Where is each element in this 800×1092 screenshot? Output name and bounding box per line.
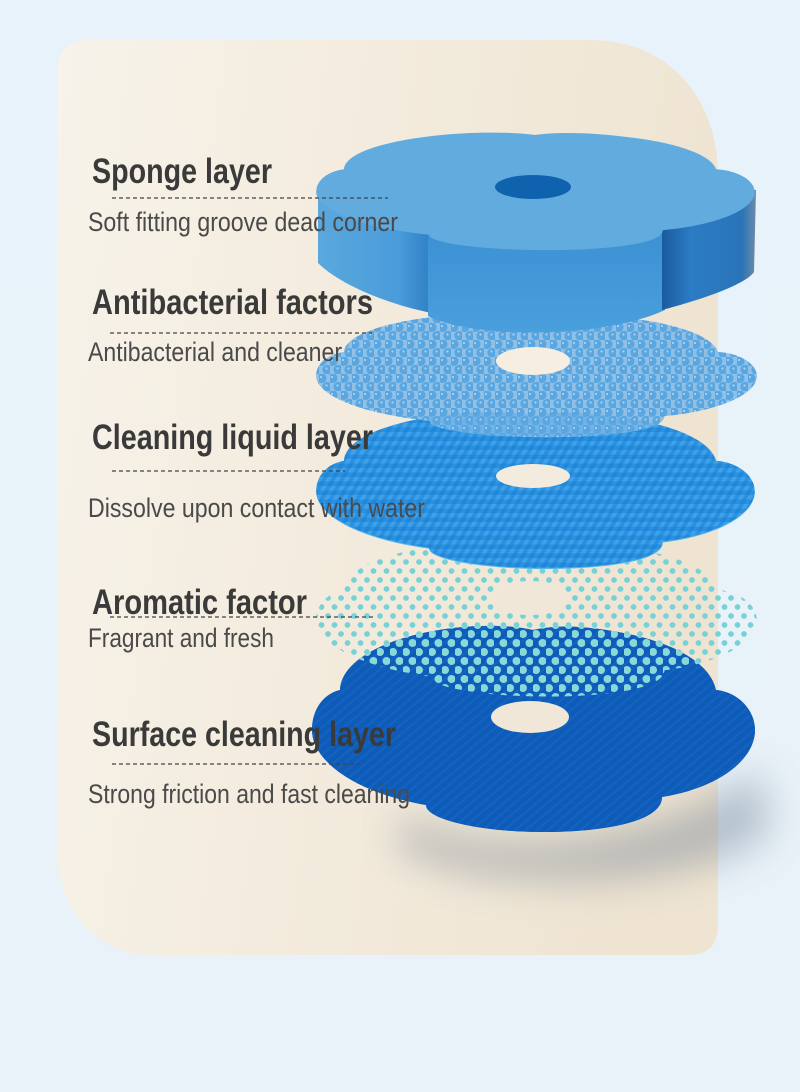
layer: cleaning liquid [316, 412, 755, 569]
layer: sponge [316, 133, 756, 333]
layer: surface cleaning [312, 626, 755, 832]
label: aromatic factor [88, 583, 375, 653]
label: cleaning liquid layer [88, 418, 425, 523]
layer: antibacterial factors [316, 317, 757, 438]
panel: cream backdrop [57, 40, 718, 955]
label: antibacterial factors [88, 283, 373, 367]
label: surface cleaning layer: Surface cleaning layer [92, 715, 396, 754]
shadow under layers [400, 770, 770, 880]
label: cleaning liquid layer: Cleaning liquid layer [92, 418, 373, 457]
label: surface cleaning layer: Strong friction and fast cleaning [88, 779, 410, 809]
label: surface cleaning layer [88, 715, 410, 809]
layer: aromatic factor [316, 550, 757, 696]
label: aromatic factor: Fragrant and fresh [88, 623, 274, 653]
label: sponge layer: Soft fitting groove dead corner [88, 207, 398, 237]
label: aromatic factor: Aromatic factor [92, 583, 307, 622]
label: sponge layer [88, 152, 398, 237]
label: antibacterial factors: Antibacterial factors [92, 283, 373, 322]
label: antibacterial factors: Antibacterial and cleaner [88, 337, 342, 367]
label: cleaning liquid layer: Dissolve upon contact with water [88, 493, 425, 523]
label: sponge layer: Sponge layer [92, 152, 272, 191]
